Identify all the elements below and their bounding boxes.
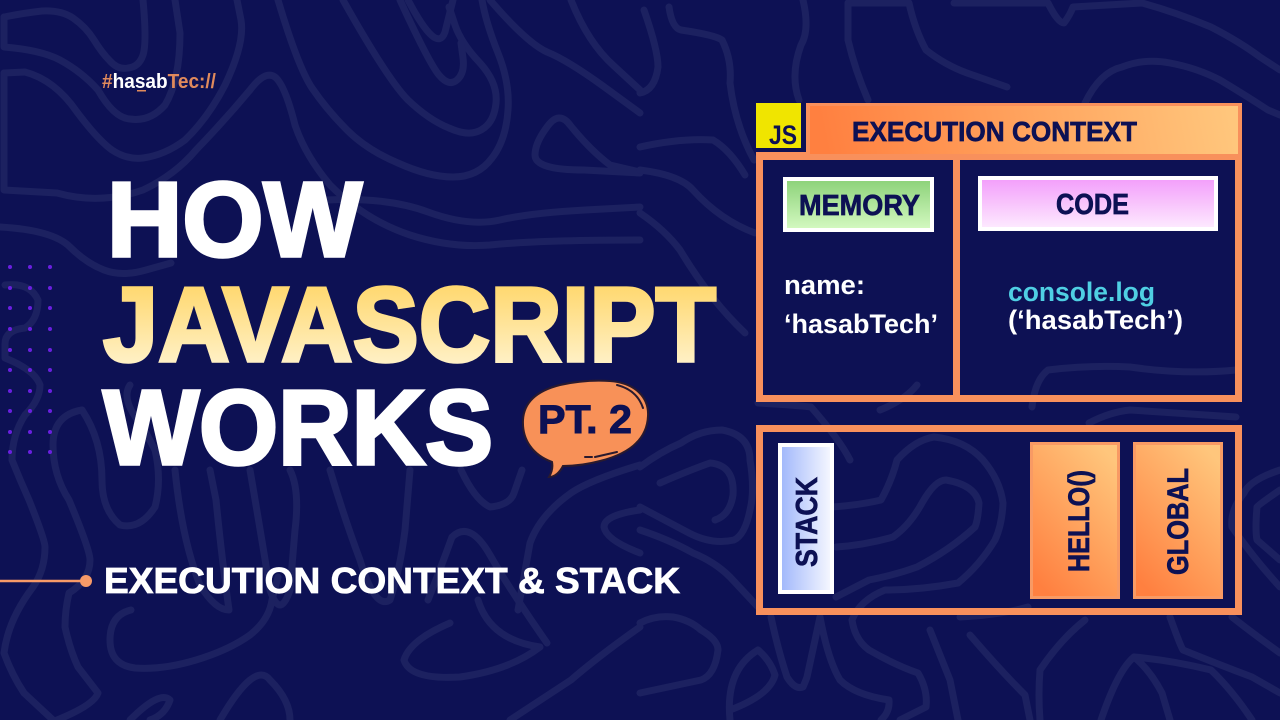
panel: execution context	[756, 103, 1242, 402]
title: HOW	[107, 161, 362, 279]
brand logo: #hasabTec://	[102, 71, 216, 93]
stack frame: global	[1133, 442, 1223, 599]
header bar	[810, 106, 1238, 154]
code contents	[1008, 277, 1183, 335]
speech bubble: part 2	[523, 381, 648, 477]
stack label	[778, 443, 834, 594]
memory contents: name:	[784, 270, 865, 300]
stack frame: hello	[1030, 442, 1120, 599]
title: WORKS	[103, 369, 493, 487]
stack frame: hello: HELLO()	[1063, 470, 1096, 572]
code label: CODE	[1056, 189, 1129, 221]
code label	[978, 176, 1218, 231]
icon: JS badge: JS	[769, 120, 797, 150]
memory contents	[784, 270, 938, 339]
memory label	[783, 177, 934, 232]
header bar: EXECUTION CONTEXT	[852, 116, 1137, 147]
stack frame: global: GLOBAL	[1162, 468, 1195, 575]
memory label: MEMORY	[799, 190, 920, 222]
code contents: (‘hasabTech’)	[1008, 305, 1183, 335]
subtitle with connector: EXECUTION CONTEXT & STACK	[104, 560, 680, 601]
panel: call stack	[756, 425, 1242, 615]
stack label: STACK	[789, 476, 824, 567]
icon: JS badge	[756, 103, 806, 152]
code contents: console.log	[1008, 277, 1155, 307]
decorative purple dot grid	[8, 265, 52, 454]
memory contents: ‘hasabTech’	[784, 309, 938, 339]
title: JAVASCRIPT	[103, 266, 716, 384]
speech bubble: part 2: PT. 2	[538, 398, 632, 442]
title	[103, 161, 716, 487]
